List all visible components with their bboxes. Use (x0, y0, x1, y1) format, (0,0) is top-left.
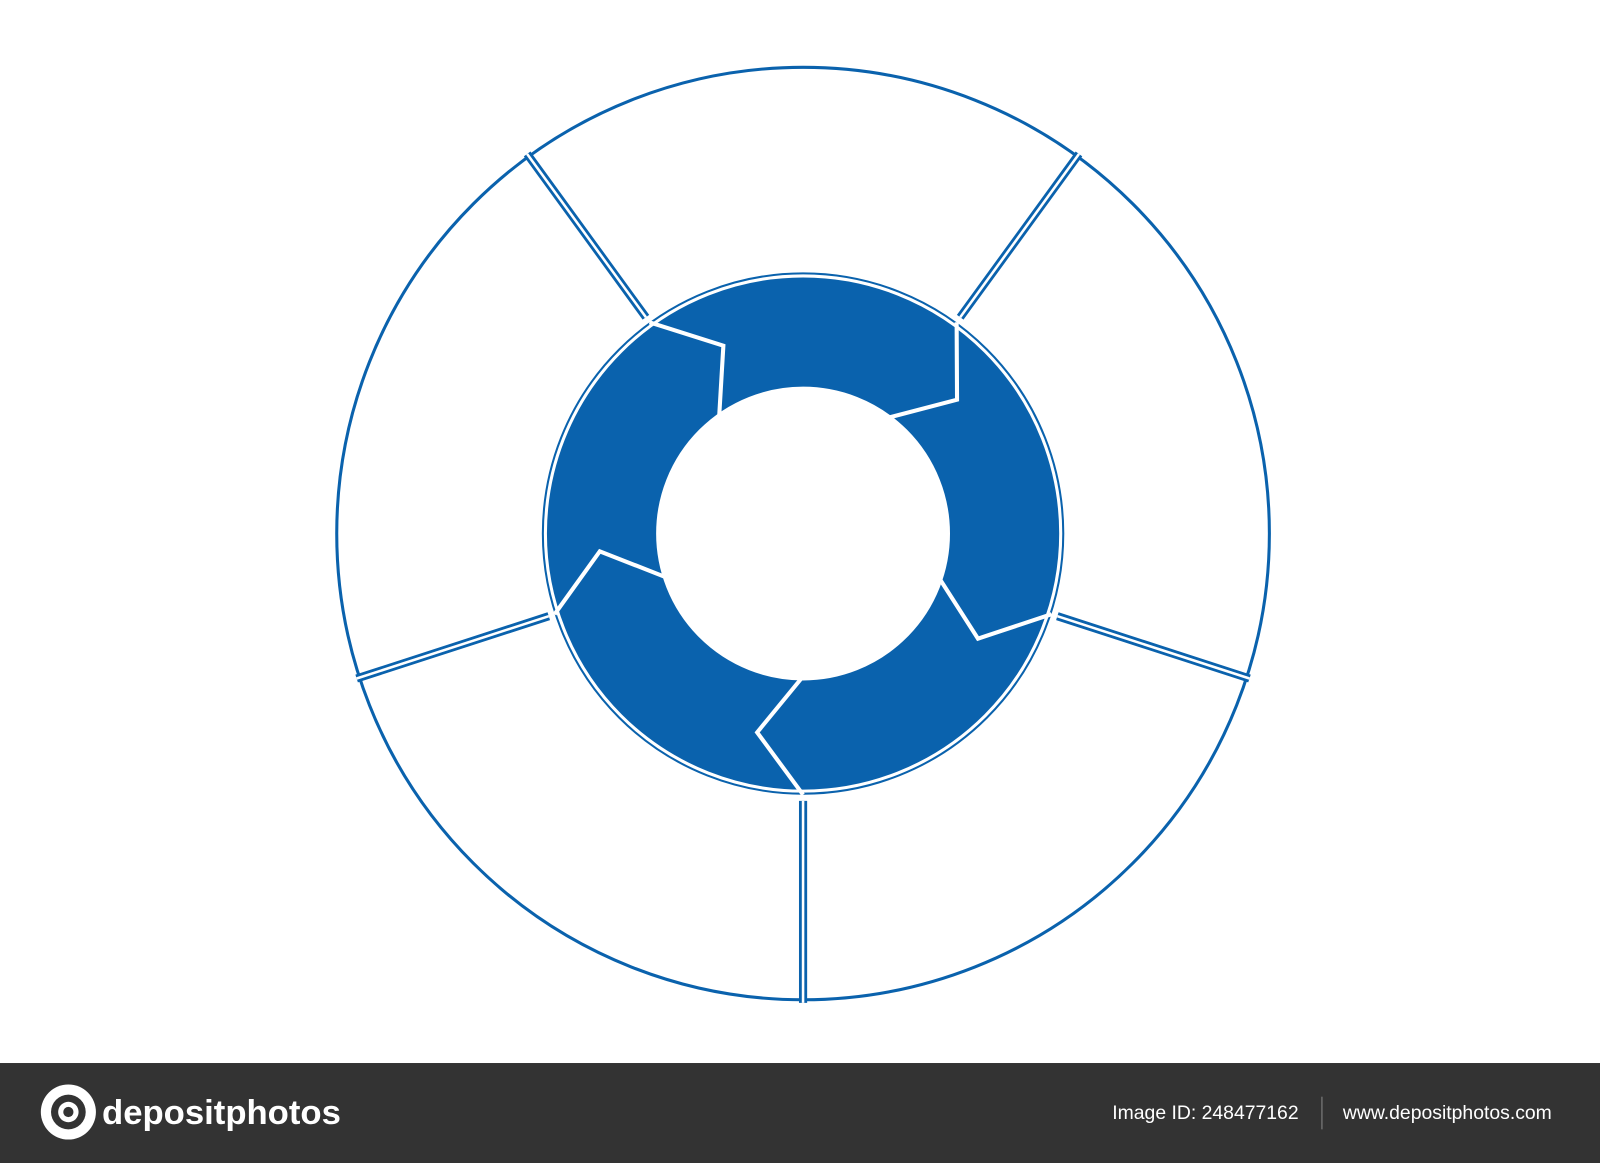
footer bar (0, 1063, 1600, 1163)
icon: camera logo (41, 1084, 96, 1140)
diagram: cycle wheel (337, 67, 1269, 1003)
spokes (357, 154, 1249, 1003)
image id: Image ID: 248477162 (1112, 1102, 1299, 1124)
brand name: depositphotos (102, 1094, 341, 1132)
outer circle (337, 67, 1269, 1000)
website: www.depositphotos.com (1342, 1102, 1552, 1124)
inner ring: arrow segments (543, 273, 1063, 795)
